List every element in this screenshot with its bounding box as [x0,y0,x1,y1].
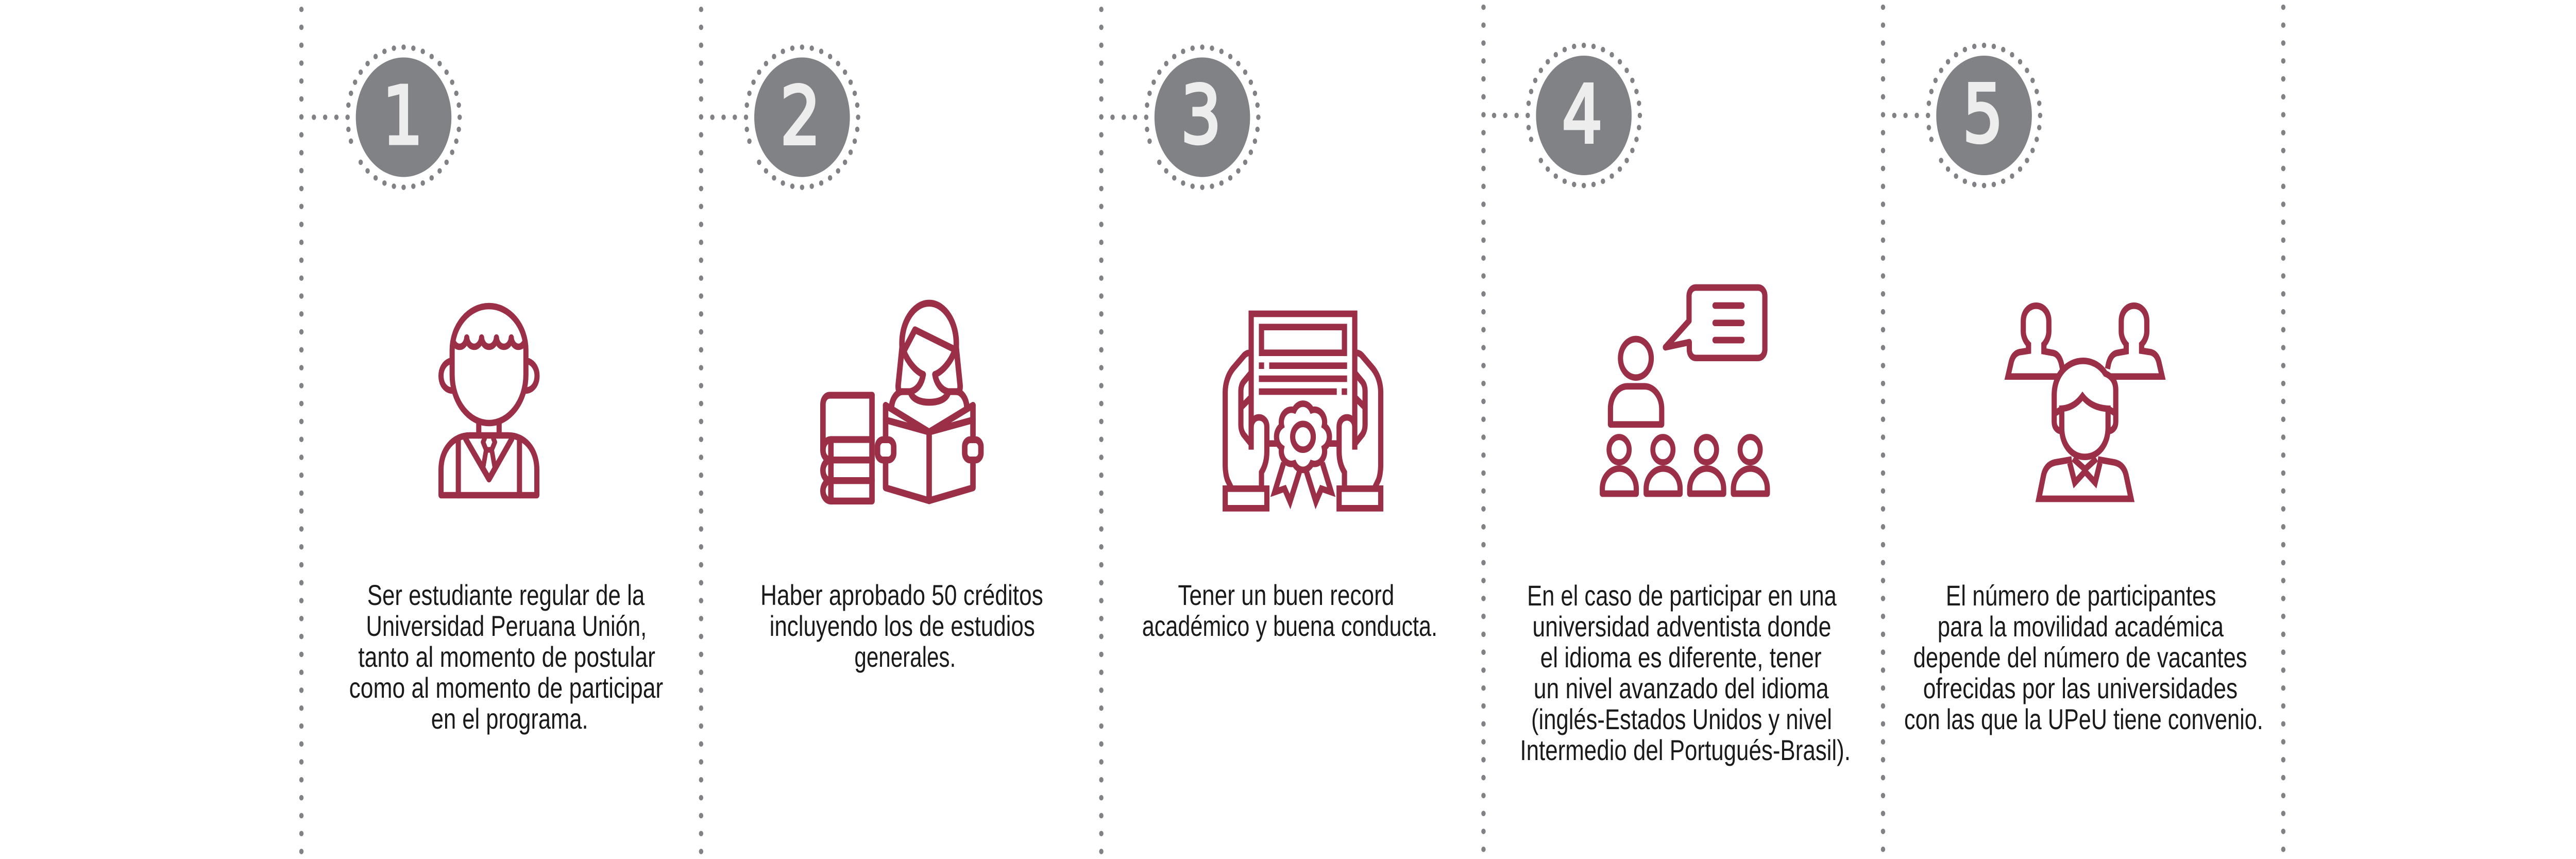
panel: step 1 [314,47,663,735]
description 2: Haber aprobado 50 créditos [760,579,1043,611]
description 5: depende del número de vacantes [1913,641,2247,673]
description 5 [1904,579,2263,735]
description 5: con las que la UPeU tiene convenio. [1904,703,2263,735]
number badge 5 [1894,45,2040,186]
description 1: Ser estudiante regular de la [367,579,645,611]
description 4: Intermedio del Portugués-Brasil). [1520,734,1851,766]
number badge 4: 4 [1562,69,1602,162]
description 1: Universidad Peruana Unión, [366,610,647,642]
description 4 [1520,579,1851,766]
description 2: incluyendo los de estudios [770,610,1035,642]
panel: step 3 [1112,47,1437,642]
number badge 1: 1 [382,70,423,163]
description 3: Tener un buen record [1178,579,1394,611]
icon: hands holding certificate [1225,314,1381,508]
icon: speaker with audience and speech bubble [1602,288,1767,494]
description 2: generales. [854,641,956,673]
panel: step 5 [1894,45,2263,735]
description 4: En el caso de participar en una [1527,579,1837,612]
description 3 [1142,579,1437,642]
description 5: El número de participantes [1946,579,2216,612]
description 1: tanto al momento de postular [358,641,655,673]
number badge 2: 2 [780,71,821,163]
number badge 5: 5 [1962,69,2003,161]
description 4: universidad adventista donde [1532,610,1831,643]
number badge 1 [314,47,460,188]
description 3: académico y buena conducta. [1142,610,1437,642]
description 1 [349,579,663,735]
icon: student reading with books [823,303,981,501]
description 4: el idioma es diferente, tener [1540,641,1822,673]
panel: step 2 [713,47,1043,673]
description 1: como al momento de participar [349,671,663,704]
panel: step 4 [1494,45,1851,766]
icon: student with tie [441,306,537,495]
icon: three people [2008,306,2162,499]
description 5: ofrecidas por las universidades [1923,672,2238,704]
description 4: un nivel avanzado del idioma [1534,672,1829,704]
number badge 3 [1112,47,1258,188]
description 2 [760,579,1043,673]
number badge 2 [713,47,858,188]
number badge 3: 3 [1181,70,1222,162]
description 5: para la movilidad académica [1938,610,2224,643]
description 4: (inglés-Estados Unidos y nivel [1531,703,1832,735]
number badge 4 [1494,45,1640,186]
description 1: en el programa. [431,702,588,735]
